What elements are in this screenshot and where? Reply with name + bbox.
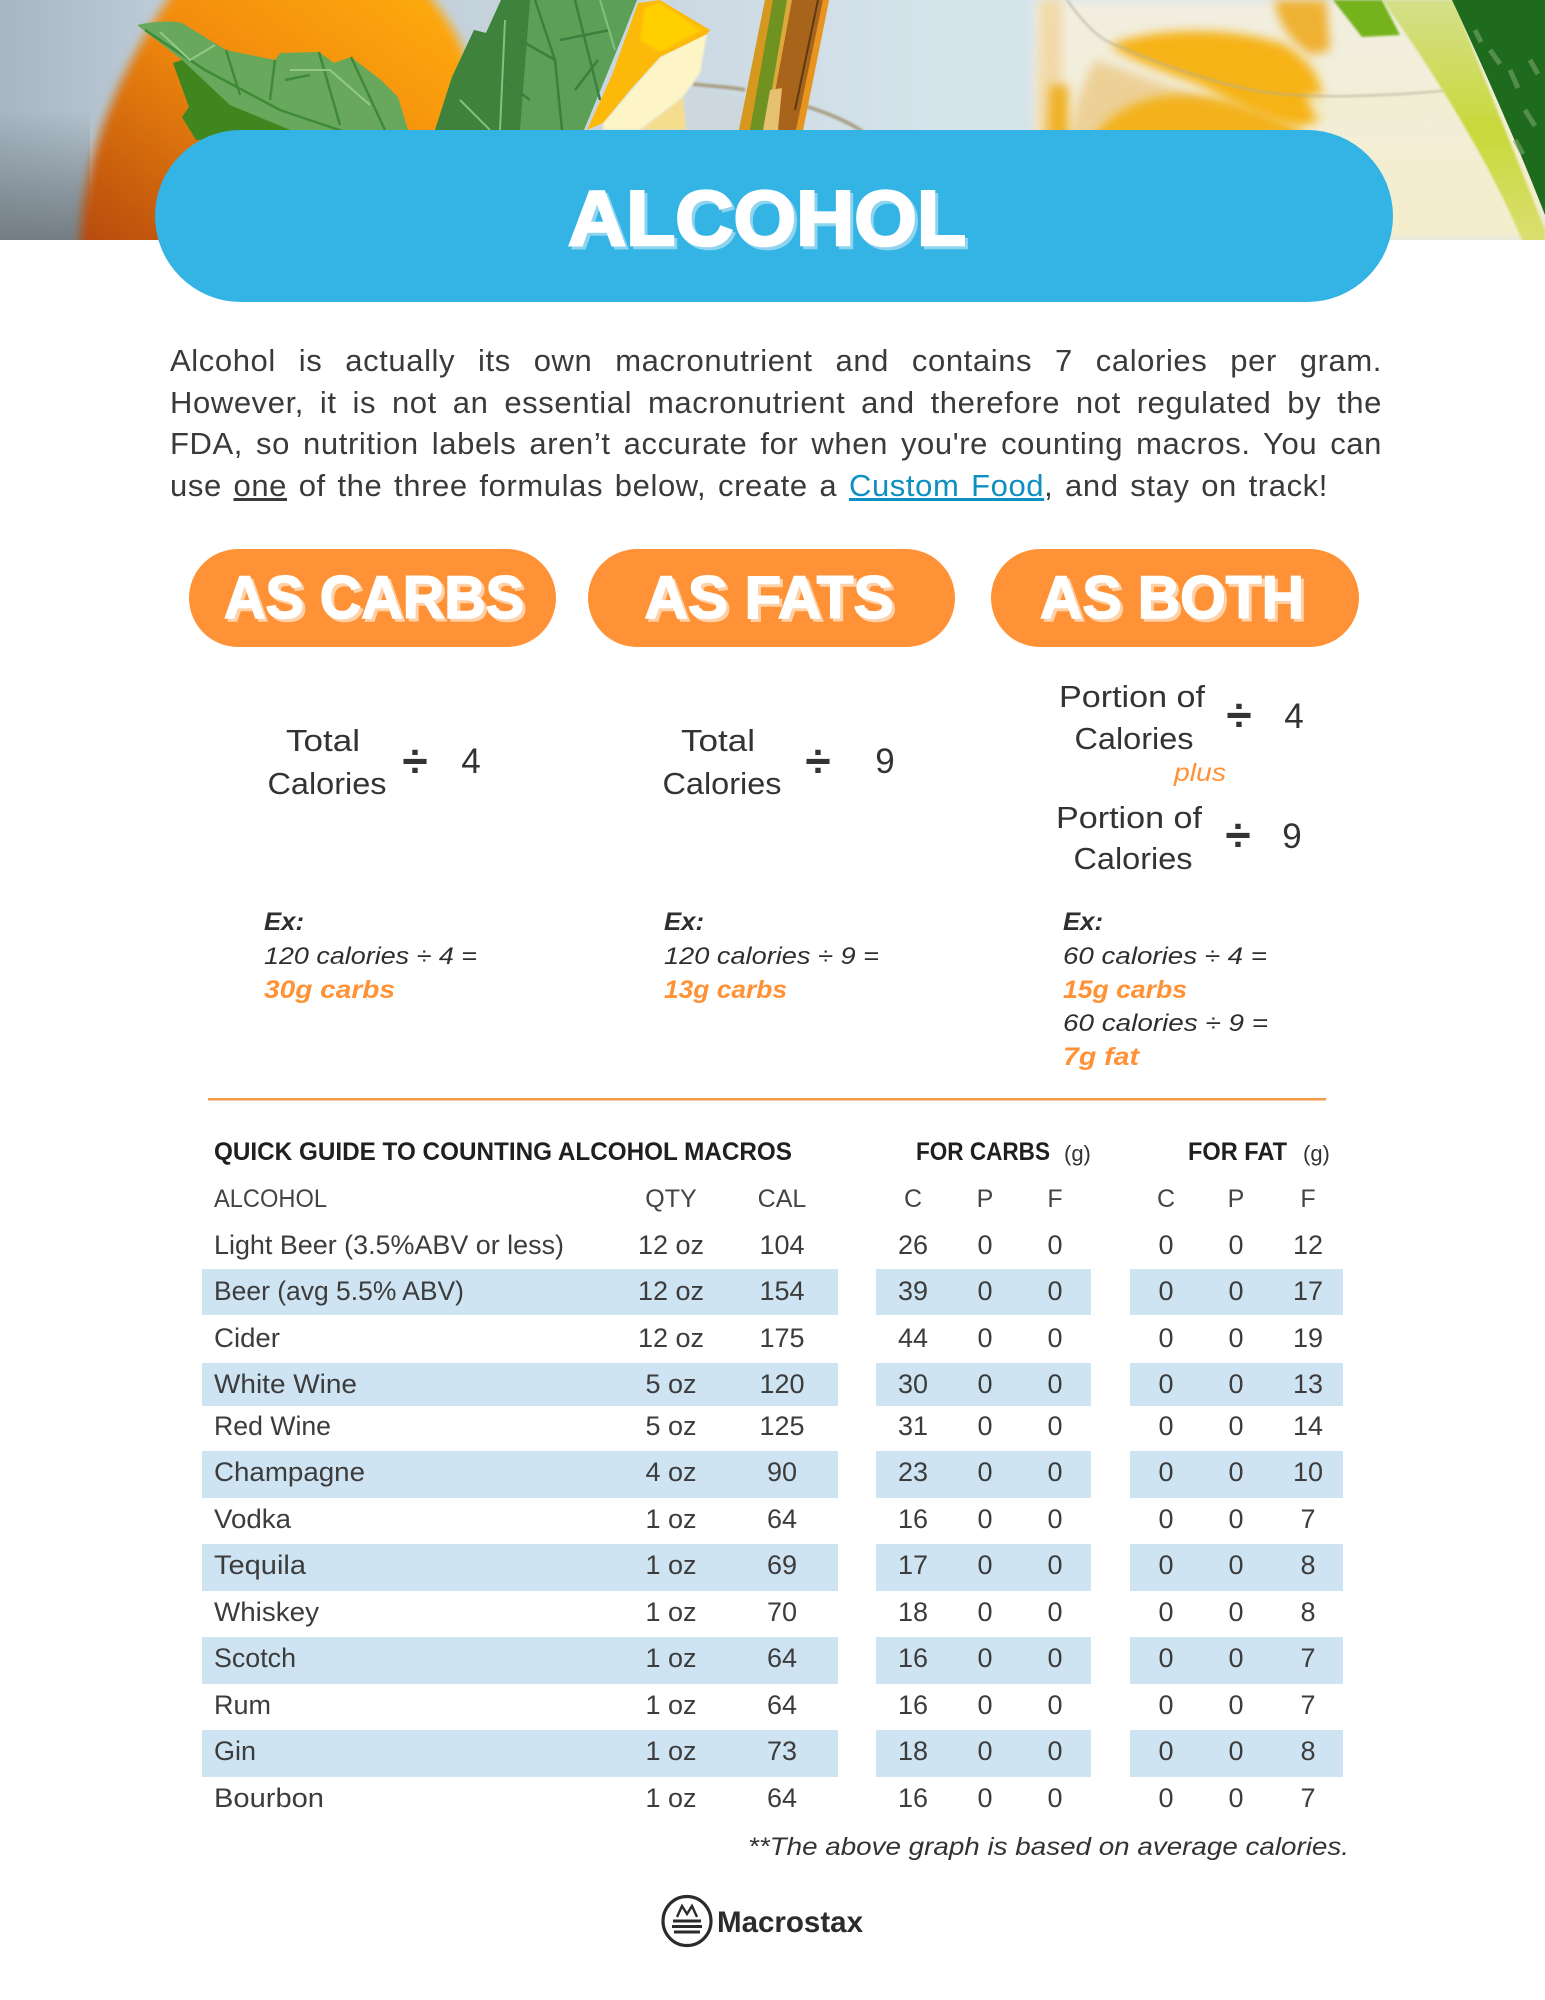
row: gin: 0 <box>1047 1736 1063 1766</box>
row: tequila: 69 <box>767 1550 797 1580</box>
formula: as both: plus <box>1173 759 1226 787</box>
row: tequila: Tequila <box>214 1550 307 1580</box>
button: as fats: AS FATS <box>648 567 896 634</box>
row: cider: 0 <box>1228 1323 1244 1353</box>
row: beer <box>214 1276 1323 1306</box>
row: bourbon: 0 <box>1228 1783 1244 1813</box>
example: as both: 15g carbs <box>1063 976 1187 1004</box>
formula: as both: Portion of <box>1056 800 1202 835</box>
row: cider: Cider <box>214 1323 280 1353</box>
row: beer: Beer (avg 5.5% ABV) <box>214 1276 464 1306</box>
row: tequila: 0 <box>1047 1550 1063 1580</box>
column headers: P <box>977 1185 993 1213</box>
example: as fats <box>664 908 879 1004</box>
row: tequila: 0 <box>1158 1550 1174 1580</box>
row: white wine <box>214 1369 1323 1399</box>
example: as carbs: 120 calories ÷ 4 = <box>264 943 477 970</box>
formula: as carbs: Total <box>286 723 360 758</box>
table heading: QUICK GUIDE TO COUNTING ALCOHOL MACROS <box>214 1138 792 1166</box>
row: cider: 0 <box>1158 1323 1174 1353</box>
example: as both: 60 calories ÷ 4 = <box>1063 943 1267 970</box>
row: tequila: 0 <box>1228 1550 1244 1580</box>
intro paragraph <box>170 343 1382 503</box>
row: bourbon: 0 <box>1158 1783 1174 1813</box>
row: vodka: 0 <box>1047 1504 1063 1534</box>
row: scotch: 1 oz <box>645 1643 697 1673</box>
example: as carbs: 30g carbs <box>264 976 395 1004</box>
button: as fats <box>588 549 955 647</box>
row: vodka: 16 <box>898 1504 928 1534</box>
row: gin: 73 <box>767 1736 797 1766</box>
row: cider: 12 oz <box>638 1323 704 1353</box>
row: beer: 17 <box>1293 1276 1323 1306</box>
example: as fats: 120 calories ÷ 9 = <box>664 943 879 970</box>
row: white wine: 0 <box>1228 1369 1244 1399</box>
row: beer: 39 <box>898 1276 928 1306</box>
row: bourbon: 0 <box>977 1783 993 1813</box>
formula: as carbs: Calories <box>268 766 386 801</box>
row: scotch: 16 <box>898 1643 928 1673</box>
row: beer: 0 <box>1228 1276 1244 1306</box>
table heading: FOR FAT <box>1188 1138 1287 1166</box>
row: champagne: 0 <box>1158 1457 1174 1487</box>
row: tequila: 8 <box>1300 1550 1316 1580</box>
row: white wine: 5 oz <box>645 1369 697 1399</box>
row: white wine: 13 <box>1293 1369 1323 1399</box>
row: whiskey <box>214 1597 1316 1627</box>
column headers: P <box>1228 1185 1244 1213</box>
row: bourbon: 1 oz <box>645 1783 697 1813</box>
formula: as both: ÷ <box>1225 809 1251 861</box>
row: red wine: 5 oz <box>645 1411 697 1441</box>
row: red wine: 0 <box>977 1411 993 1441</box>
row: vodka: 0 <box>977 1504 993 1534</box>
example: as both: 7g fat <box>1063 1043 1141 1071</box>
button: as both <box>991 549 1359 647</box>
formula: as both <box>1056 679 1304 876</box>
row: bourbon: 7 <box>1300 1783 1316 1813</box>
button: as carbs: AS CARBS <box>224 564 524 631</box>
row: light beer <box>214 1230 1323 1260</box>
intro paragraph: use one of the three formulas below, create a Custom Food, and stay on track! <box>170 468 1328 503</box>
row: light beer: 0 <box>1158 1230 1174 1260</box>
example: as both <box>1063 908 1268 1071</box>
row: scotch: 0 <box>977 1643 993 1673</box>
row: red wine: Red Wine <box>214 1411 331 1441</box>
row: rum: 0 <box>1047 1690 1063 1720</box>
row: cider: 44 <box>898 1323 928 1353</box>
formula: as both: Calories <box>1074 841 1192 876</box>
title: ALCOHOL: ALCOHOL <box>568 174 966 262</box>
row: scotch: Scotch <box>214 1643 296 1673</box>
row: gin: 8 <box>1300 1736 1316 1766</box>
row: scotch: 0 <box>1228 1643 1244 1673</box>
row: rum: 0 <box>977 1690 993 1720</box>
button: as carbs <box>189 549 556 647</box>
row: gin: Gin <box>214 1736 256 1766</box>
row: rum: Rum <box>214 1690 271 1720</box>
column headers: QTY <box>645 1185 697 1213</box>
row: champagne: 0 <box>1228 1457 1244 1487</box>
intro paragraph: Alcohol is actually its own macronutrient and contains 7 calories per gram. <box>170 343 1382 378</box>
intro paragraph: FDA, so nutrition labels aren’t accurate for when you're counting macros. You can <box>170 426 1382 461</box>
row: tequila: 17 <box>898 1550 928 1580</box>
row: rum: 0 <box>1158 1690 1174 1720</box>
row: beer: 0 <box>1158 1276 1174 1306</box>
example: as both: 60 calories ÷ 9 = <box>1063 1010 1268 1037</box>
button: as both: AS BOTH <box>1040 564 1304 631</box>
row: whiskey: 0 <box>1158 1597 1174 1627</box>
formula: as both: 4 <box>1284 697 1304 736</box>
row: white wine: 0 <box>977 1369 993 1399</box>
row: champagne: 0 <box>1047 1457 1063 1487</box>
row: whiskey: 8 <box>1300 1597 1316 1627</box>
row: white wine: White Wine <box>214 1369 357 1399</box>
row: light beer: 104 <box>759 1230 805 1260</box>
row: champagne: 0 <box>977 1457 993 1487</box>
table heading: (g) <box>1064 1141 1091 1166</box>
table heading <box>214 1138 1330 1166</box>
row: whiskey: 0 <box>977 1597 993 1627</box>
footnote: **The above graph is based on average calories. <box>748 1833 1349 1861</box>
row: scotch: 7 <box>1300 1643 1316 1673</box>
row: tequila: 1 oz <box>645 1550 697 1580</box>
row: beer: 12 oz <box>638 1276 704 1306</box>
formula: as both: 9 <box>1282 817 1302 856</box>
icon: mountain in circle <box>663 1896 711 1946</box>
row: red wine: 31 <box>898 1411 928 1441</box>
title banner <box>155 130 1393 302</box>
mint leaf, left <box>137 22 408 140</box>
button: as fats: AS FATS <box>644 564 894 631</box>
formula: as fats: 9 <box>875 742 895 781</box>
row: red wine: 0 <box>1047 1411 1063 1441</box>
formula: as fats: Calories <box>662 766 782 801</box>
formula: as both: Portion of <box>1059 679 1205 714</box>
row: red wine: 125 <box>759 1411 805 1441</box>
row: champagne: Champagne <box>214 1457 365 1487</box>
row: vodka: 0 <box>1228 1504 1244 1534</box>
row: beer: 154 <box>759 1276 805 1306</box>
row: scotch: 64 <box>767 1643 797 1673</box>
row: bourbon: 16 <box>898 1783 928 1813</box>
row: rum: 1 oz <box>645 1690 697 1720</box>
row: light beer: 26 <box>898 1230 928 1260</box>
example: as carbs <box>264 908 477 1004</box>
row: rum <box>214 1690 1316 1720</box>
button: as carbs: AS CARBS <box>227 567 527 634</box>
row: bourbon: 0 <box>1047 1783 1063 1813</box>
row: cider: 0 <box>977 1323 993 1353</box>
formula: as fats <box>662 723 895 801</box>
row: white wine: 30 <box>898 1369 928 1399</box>
row: cider: 175 <box>759 1323 805 1353</box>
formula: as carbs <box>268 723 481 801</box>
row: red wine <box>214 1411 1323 1441</box>
title: ALCOHOL: ALCOHOL <box>571 177 969 265</box>
column headers: ALCOHOL <box>214 1185 327 1213</box>
row: vodka: 1 oz <box>645 1504 697 1534</box>
example: as fats: 13g carbs <box>664 976 787 1004</box>
row: champagne: 23 <box>898 1457 928 1487</box>
formula: as carbs: 4 <box>461 742 481 781</box>
row: beer: 0 <box>977 1276 993 1306</box>
row: whiskey: Whiskey <box>214 1597 320 1627</box>
row: bourbon: Bourbon <box>214 1783 324 1813</box>
row: beer: 0 <box>1047 1276 1063 1306</box>
row: gin: 0 <box>977 1736 993 1766</box>
column headers <box>214 1185 1316 1213</box>
row: light beer: 0 <box>1228 1230 1244 1260</box>
column headers: F <box>1047 1185 1063 1213</box>
row: white wine: 120 <box>759 1369 805 1399</box>
row: light beer: 0 <box>1047 1230 1063 1260</box>
row: vodka: 7 <box>1300 1504 1316 1534</box>
row: rum: 7 <box>1300 1690 1316 1720</box>
row: whiskey: 18 <box>898 1597 928 1627</box>
row: whiskey: 0 <box>1228 1597 1244 1627</box>
row: rum: 0 <box>1228 1690 1244 1720</box>
table row bands <box>202 1269 1343 1777</box>
row: red wine: 0 <box>1158 1411 1174 1441</box>
table: quick guide to counting alcohol macros <box>202 1138 1343 1813</box>
row: whiskey: 70 <box>767 1597 797 1627</box>
row: champagne: 90 <box>767 1457 797 1487</box>
table heading: FOR CARBS <box>916 1138 1050 1166</box>
row: light beer: 12 <box>1293 1230 1323 1260</box>
row: white wine: 0 <box>1158 1369 1174 1399</box>
row: light beer: 0 <box>977 1230 993 1260</box>
formula: as carbs: ÷ <box>402 735 428 787</box>
lemon slice <box>587 0 710 130</box>
mint leaf, right <box>435 0 637 130</box>
header photo: citrus, mint and straw <box>0 0 1545 260</box>
row: gin: 0 <box>1158 1736 1174 1766</box>
table heading: (g) <box>1303 1141 1330 1166</box>
row: cider: 19 <box>1293 1323 1323 1353</box>
row: gin: 0 <box>1228 1736 1244 1766</box>
row: rum: 16 <box>898 1690 928 1720</box>
column headers: CAL <box>758 1185 806 1213</box>
row: red wine: 0 <box>1228 1411 1244 1441</box>
row: white wine: 0 <box>1047 1369 1063 1399</box>
row: scotch: 0 <box>1158 1643 1174 1673</box>
example: as both: Ex: <box>1063 908 1103 936</box>
row: cider <box>214 1323 1323 1353</box>
row: gin: 18 <box>898 1736 928 1766</box>
row: champagne: 10 <box>1293 1457 1323 1487</box>
formula: as fats: ÷ <box>805 735 831 787</box>
row: champagne: 4 oz <box>645 1457 697 1487</box>
gold straw <box>739 0 829 130</box>
button: as both: AS BOTH <box>1043 567 1307 634</box>
column headers: F <box>1300 1185 1316 1213</box>
logo: Macrostax <box>663 1896 863 1946</box>
column headers: C <box>904 1185 922 1213</box>
row: scotch: 0 <box>1047 1643 1063 1673</box>
row: vodka <box>214 1504 1316 1534</box>
row: scotch <box>214 1643 1316 1673</box>
logo: Macrostax: Macrostax <box>717 1906 863 1939</box>
row: cider: 0 <box>1047 1323 1063 1353</box>
row: vodka: 64 <box>767 1504 797 1534</box>
row: gin: 1 oz <box>645 1736 697 1766</box>
row: tequila: 0 <box>977 1550 993 1580</box>
formula: as fats: Total <box>681 723 755 758</box>
example: as fats: Ex: <box>664 908 704 936</box>
row: gin <box>214 1736 1316 1766</box>
row: whiskey: 1 oz <box>645 1597 697 1627</box>
row: bourbon: 64 <box>767 1783 797 1813</box>
row: whiskey: 0 <box>1047 1597 1063 1627</box>
row: light beer: Light Beer (3.5%ABV or less) <box>214 1230 564 1260</box>
intro paragraph: However, it is not an essential macronutrient and therefore not regulated by the <box>170 385 1382 420</box>
row: vodka: Vodka <box>214 1504 292 1534</box>
row: red wine: 14 <box>1293 1411 1323 1441</box>
column headers: C <box>1157 1185 1175 1213</box>
row: rum: 64 <box>767 1690 797 1720</box>
row: champagne <box>214 1457 1323 1487</box>
row: bourbon <box>214 1783 1316 1813</box>
row: light beer: 12 oz <box>638 1230 704 1260</box>
example: as carbs: Ex: <box>264 908 304 936</box>
formula: as both: ÷ <box>1226 689 1252 741</box>
row: tequila <box>214 1550 1316 1580</box>
row: vodka: 0 <box>1158 1504 1174 1534</box>
formula: as both: Calories <box>1074 721 1194 756</box>
